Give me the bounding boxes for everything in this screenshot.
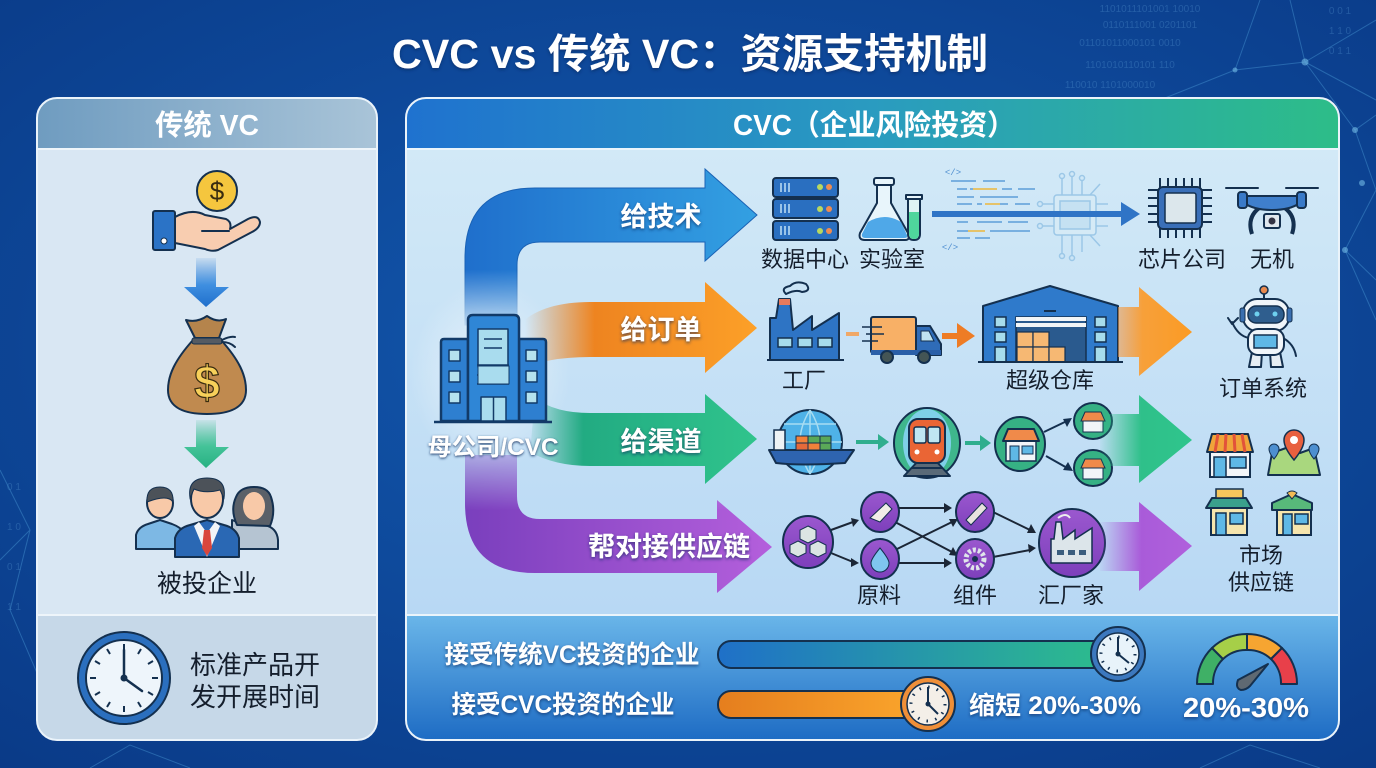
bar: traditional VC timeline [718, 641, 1108, 668]
text: standard product development time: 发开展时间 [190, 682, 320, 712]
icon: money bag [168, 316, 246, 414]
label: super warehouse: 超级仓库 [1006, 368, 1094, 393]
footer label: traditional VC: 接受传统VC投资的企业 [444, 641, 700, 669]
labels: raw materials, components, assembler: 组件 [953, 583, 997, 608]
label: parent company: 母公司/CVC [428, 434, 558, 461]
background: 0 0 1 [1329, 6, 1352, 17]
arrow: connect supply chain [465, 455, 772, 593]
footer label: CVC: 接受CVC投资的企业 [452, 691, 674, 719]
text: standard product development time [190, 650, 320, 712]
icon: main store [995, 417, 1045, 471]
label: chip company: 芯片公司 [1138, 247, 1226, 272]
arrow: ship to train [856, 434, 889, 450]
text: gauge value: 20%-30% [1183, 692, 1309, 723]
text: shortened by 20%-30%: 缩短 20%-30% [969, 692, 1141, 720]
icon: delivery truck [846, 317, 941, 363]
label: market supply chain: 市场 [1239, 543, 1283, 568]
icon: robot [1228, 286, 1296, 367]
icon: small stores [1044, 403, 1112, 486]
icon: three people [136, 478, 278, 557]
gauge [1197, 634, 1297, 690]
label: laboratory: 实验室 [859, 247, 925, 272]
arrow: give technology: 给技术 [620, 202, 702, 232]
icon: market stores and map [1206, 430, 1320, 535]
arrow: give technology [465, 169, 757, 325]
background: 1101010110101 110 [1085, 60, 1175, 71]
arrow: give orders: 给订单 [620, 315, 702, 345]
label: order system: 订单系统 [1219, 376, 1307, 401]
arrow: give channels [530, 394, 757, 484]
arrow: blue down [184, 258, 229, 307]
icon: clock [78, 632, 170, 724]
heading: traditional VC: 传统 VC [155, 109, 259, 142]
arrow: green down [184, 420, 229, 468]
heading: CVC: CVC（企业风险投资） [733, 109, 1015, 142]
icon: super warehouse [978, 286, 1123, 362]
icon: train [894, 408, 960, 478]
icon: parent company building [434, 315, 552, 422]
label: invested company: 被投企业 [157, 570, 257, 598]
labels: raw materials, components, assembler [857, 583, 1104, 608]
background: 0 1 1 [1329, 46, 1352, 57]
arrow: big green [1100, 395, 1192, 483]
labels: raw materials, components, assembler: 汇厂家 [1038, 583, 1104, 608]
arrow: train to store [965, 435, 991, 451]
background: 01101011000101 0010 [1079, 38, 1181, 49]
panel: CVC [406, 98, 1339, 740]
label: data center: 数据中心 [761, 247, 849, 272]
icon: chip [1148, 178, 1212, 238]
icon: hand with coin [153, 171, 260, 251]
icon: clock on bar 1 [1091, 627, 1145, 681]
label: market supply chain [1228, 543, 1294, 595]
icon: hand with coin: $ [210, 176, 225, 206]
arrow: truck to warehouse [942, 323, 975, 348]
text: standard product development time: 标准产品开 [190, 650, 320, 680]
background: 1 1 0 [1329, 26, 1352, 37]
background: 1101011101001 10010 [1100, 4, 1201, 15]
arrow: big orange [1118, 287, 1192, 376]
labels: raw materials, components, assembler: 原料 [857, 583, 901, 608]
icon: laboratory flask [860, 178, 922, 240]
label: factory: 工厂 [782, 368, 826, 393]
icon: clock on bar 2 [901, 677, 955, 731]
label: drone: 无机 [1250, 247, 1294, 272]
background: 1 0 [7, 522, 21, 533]
background: 0 1 [7, 482, 21, 493]
arrow: give channels: 给渠道 [620, 427, 702, 457]
background: 1 1 [7, 602, 21, 613]
icon: factory [767, 282, 844, 360]
bar: CVC timeline [718, 691, 923, 718]
title: CVC vs 传统 VC：资源支持机制 [392, 31, 988, 77]
icon: code to chip flow arrow: </> [942, 243, 958, 253]
icon: drone [1226, 188, 1318, 234]
panel: traditional VC [37, 98, 377, 740]
arrow: big purple [1100, 502, 1192, 591]
background: 110010 1101000010 [1065, 80, 1156, 91]
diagram: supply chain network [783, 492, 1105, 579]
icon: money bag: $ [194, 356, 220, 408]
icon: ship with globe [769, 410, 854, 474]
background: 0110111001 0201101 [1103, 20, 1198, 31]
icon: code to chip flow arrow [932, 168, 1140, 260]
arrow: connect supply chain: 帮对接供应链 [588, 532, 750, 562]
arrow: give orders [522, 282, 757, 373]
label: market supply chain: 供应链 [1228, 570, 1294, 595]
icon: code to chip flow arrow: </> [945, 168, 961, 178]
icon: data center [773, 178, 838, 240]
background: 0 1 [7, 562, 21, 573]
